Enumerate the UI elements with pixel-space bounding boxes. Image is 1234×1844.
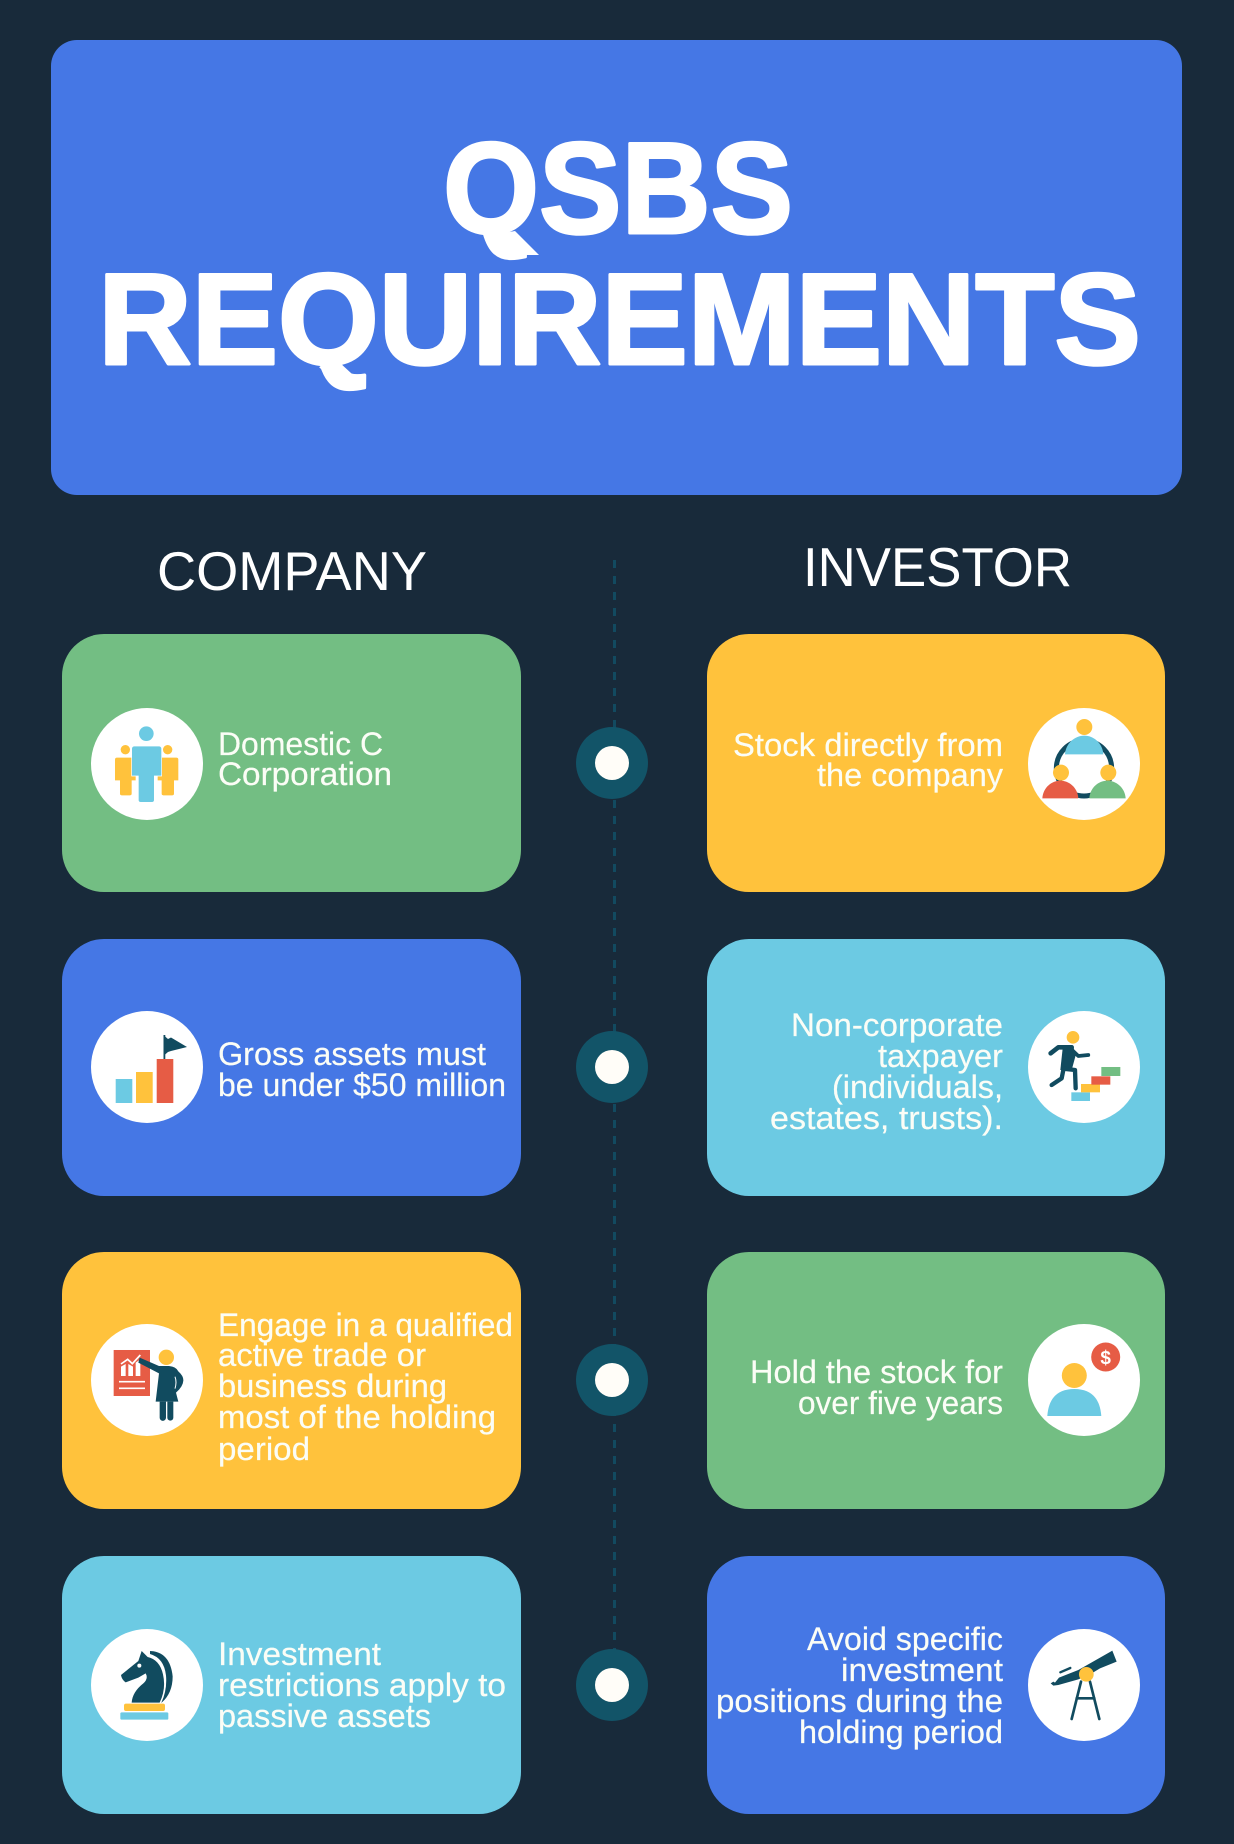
text: estates, trusts). <box>770 1100 1003 1136</box>
title: REQUIREMENTS <box>98 246 1141 392</box>
icon: presenter with chart <box>114 1350 183 1421</box>
text: Stock directly from <box>733 727 1003 763</box>
text <box>218 1307 513 1467</box>
icon: chess knight <box>120 1651 173 1720</box>
icon: three people network <box>1042 719 1126 798</box>
panel: qualified active trade <box>62 1252 521 1509</box>
panel: avoid specific positions <box>707 1556 1165 1814</box>
text <box>770 1007 1003 1136</box>
panel: investment restrictions <box>62 1556 521 1814</box>
timeline node 1 <box>576 727 648 799</box>
icon: runner on stairs <box>1051 1031 1120 1101</box>
text: period <box>218 1431 310 1467</box>
text <box>716 1621 1003 1750</box>
text: Non-corporate <box>791 1007 1003 1043</box>
icon: group of people <box>115 726 178 802</box>
panel: non-corporate taxpayer <box>707 939 1165 1196</box>
text: (individuals, <box>832 1069 1003 1105</box>
timeline node 4 <box>576 1649 648 1721</box>
panel: stock directly from company <box>707 634 1165 892</box>
text: business during <box>218 1368 447 1404</box>
icon: bars with flag <box>116 1035 187 1103</box>
text: most of the holding <box>218 1399 496 1435</box>
text: Investment <box>218 1636 381 1672</box>
title banner <box>51 40 1182 495</box>
text: Engage in a qualified <box>218 1307 513 1343</box>
text: investment <box>841 1652 1003 1688</box>
text <box>750 1354 1003 1421</box>
heading: company: COMPANY <box>157 540 427 602</box>
text: restrictions apply to <box>218 1667 506 1703</box>
icon: person with dollar coin <box>1047 1342 1120 1416</box>
text: Corporation <box>218 756 392 792</box>
text <box>733 727 1003 793</box>
title <box>98 115 1141 392</box>
text: holding period <box>799 1714 1003 1750</box>
timeline <box>576 560 648 1721</box>
text: Domestic C <box>218 726 383 762</box>
icon: telescope <box>1051 1651 1117 1719</box>
title: QSBS <box>443 115 793 261</box>
timeline node 2 <box>576 1031 648 1103</box>
text: Hold the stock for <box>750 1354 1003 1390</box>
panel: hold five years <box>707 1252 1165 1509</box>
text: taxpayer <box>878 1038 1003 1074</box>
text: Avoid specific <box>807 1621 1003 1657</box>
text: positions during the <box>716 1683 1003 1719</box>
panel: domestic C corporation <box>62 634 521 892</box>
text: active trade or <box>218 1337 426 1373</box>
text <box>218 1636 506 1734</box>
text: the company <box>817 757 1003 793</box>
panel: gross assets <box>62 939 521 1196</box>
text: be under $50 million <box>218 1067 506 1103</box>
icon: person with dollar coin: $ <box>1100 1348 1111 1369</box>
timeline node 3 <box>576 1344 648 1416</box>
text: passive assets <box>218 1698 431 1734</box>
heading: investor: INVESTOR <box>803 536 1072 598</box>
text: over five years <box>798 1385 1003 1421</box>
text: Gross assets must <box>218 1036 486 1072</box>
text <box>218 1036 506 1103</box>
text <box>218 726 392 792</box>
